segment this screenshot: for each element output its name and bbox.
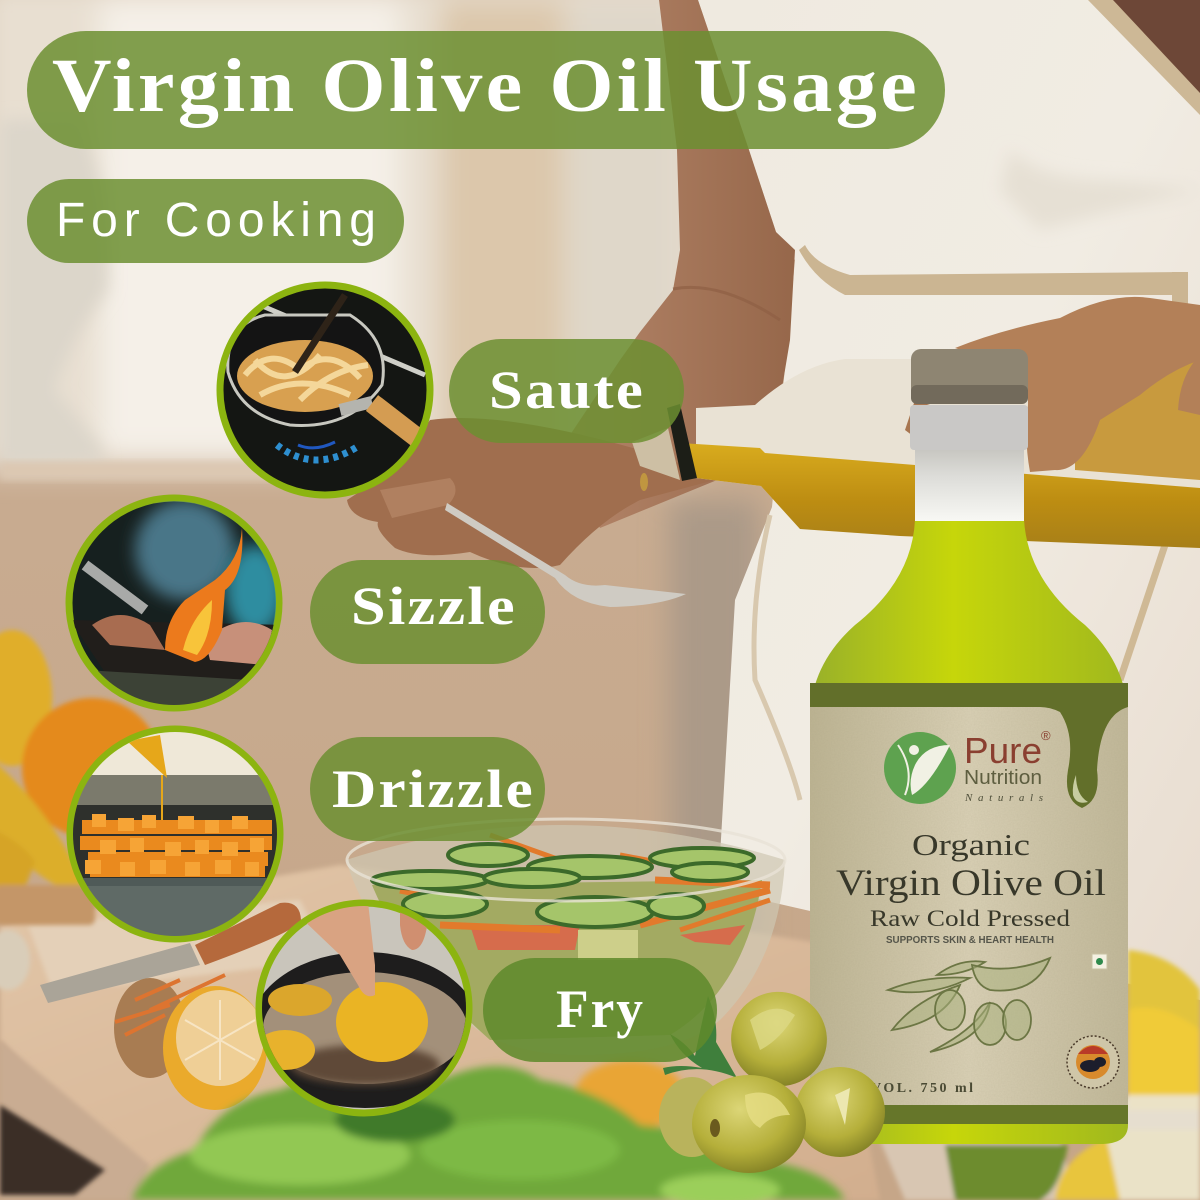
wooden cap: [911, 349, 1028, 404]
vase: [0, 118, 108, 465]
logo: Pure: [964, 730, 1042, 771]
label text: SUPPORTS SKIN & HEART HEALTH: [886, 935, 1054, 946]
olive branch illustration: [888, 958, 1050, 1052]
product bottle: [810, 349, 1128, 1144]
title pill: [27, 31, 945, 149]
fruit pile at left: [0, 630, 162, 990]
certification badge: [1067, 1036, 1119, 1088]
pill: Saute: [449, 339, 684, 443]
label text: VOL. 750 ml: [871, 1081, 973, 1096]
pouring glass bottle: [632, 359, 1200, 548]
bottle body: [810, 405, 1128, 1144]
logo: ®: [1041, 728, 1051, 743]
table: [0, 865, 880, 1200]
pill: Saute: Saute: [489, 360, 645, 420]
pill: Sizzle: Sizzle: [351, 576, 517, 636]
person: apron and arm: [560, 0, 1200, 1000]
subtitle pill: For Cooking: [56, 194, 376, 247]
hand holding spoon: [347, 418, 722, 607]
label band and drip: [810, 683, 1128, 808]
foreground lettuce: [132, 1060, 845, 1200]
label text: Virgin Olive Oil: [836, 863, 1106, 904]
title pill: Virgin Olive Oil Usage: [52, 44, 920, 128]
pill: Fry: Fry: [556, 979, 645, 1039]
logo: [884, 728, 1051, 804]
lower right fruit: [880, 950, 1200, 1200]
label text: Raw Cold Pressed: [870, 906, 1071, 931]
label text: [836, 827, 1106, 1096]
logo: Nutrition: [964, 767, 1042, 789]
label text: Organic: [912, 827, 1030, 862]
salad bowl: [346, 819, 785, 1055]
circle photo: grill flame: [69, 498, 285, 720]
glass neck: [915, 430, 1024, 521]
cutting board, knife and lemon: [40, 903, 301, 1110]
pouring hand: [905, 297, 1200, 472]
circle photo: saute pan: [220, 285, 430, 495]
circle photo: frying: [250, 902, 480, 1113]
pill: Drizzle: Drizzle: [332, 759, 535, 819]
pill: Fry: [483, 958, 717, 1062]
arm: [560, 0, 795, 528]
circle photo: drizzled squash: [65, 725, 285, 941]
frosted collar: [910, 405, 1028, 450]
pill: Drizzle: [310, 737, 545, 841]
subtitle pill: [27, 179, 404, 263]
FSSAI mark: [1092, 954, 1107, 969]
label: [810, 683, 1128, 1105]
whole olives: [659, 978, 885, 1173]
pill: Sizzle: [310, 560, 545, 664]
logo: Naturals: [964, 792, 1043, 804]
